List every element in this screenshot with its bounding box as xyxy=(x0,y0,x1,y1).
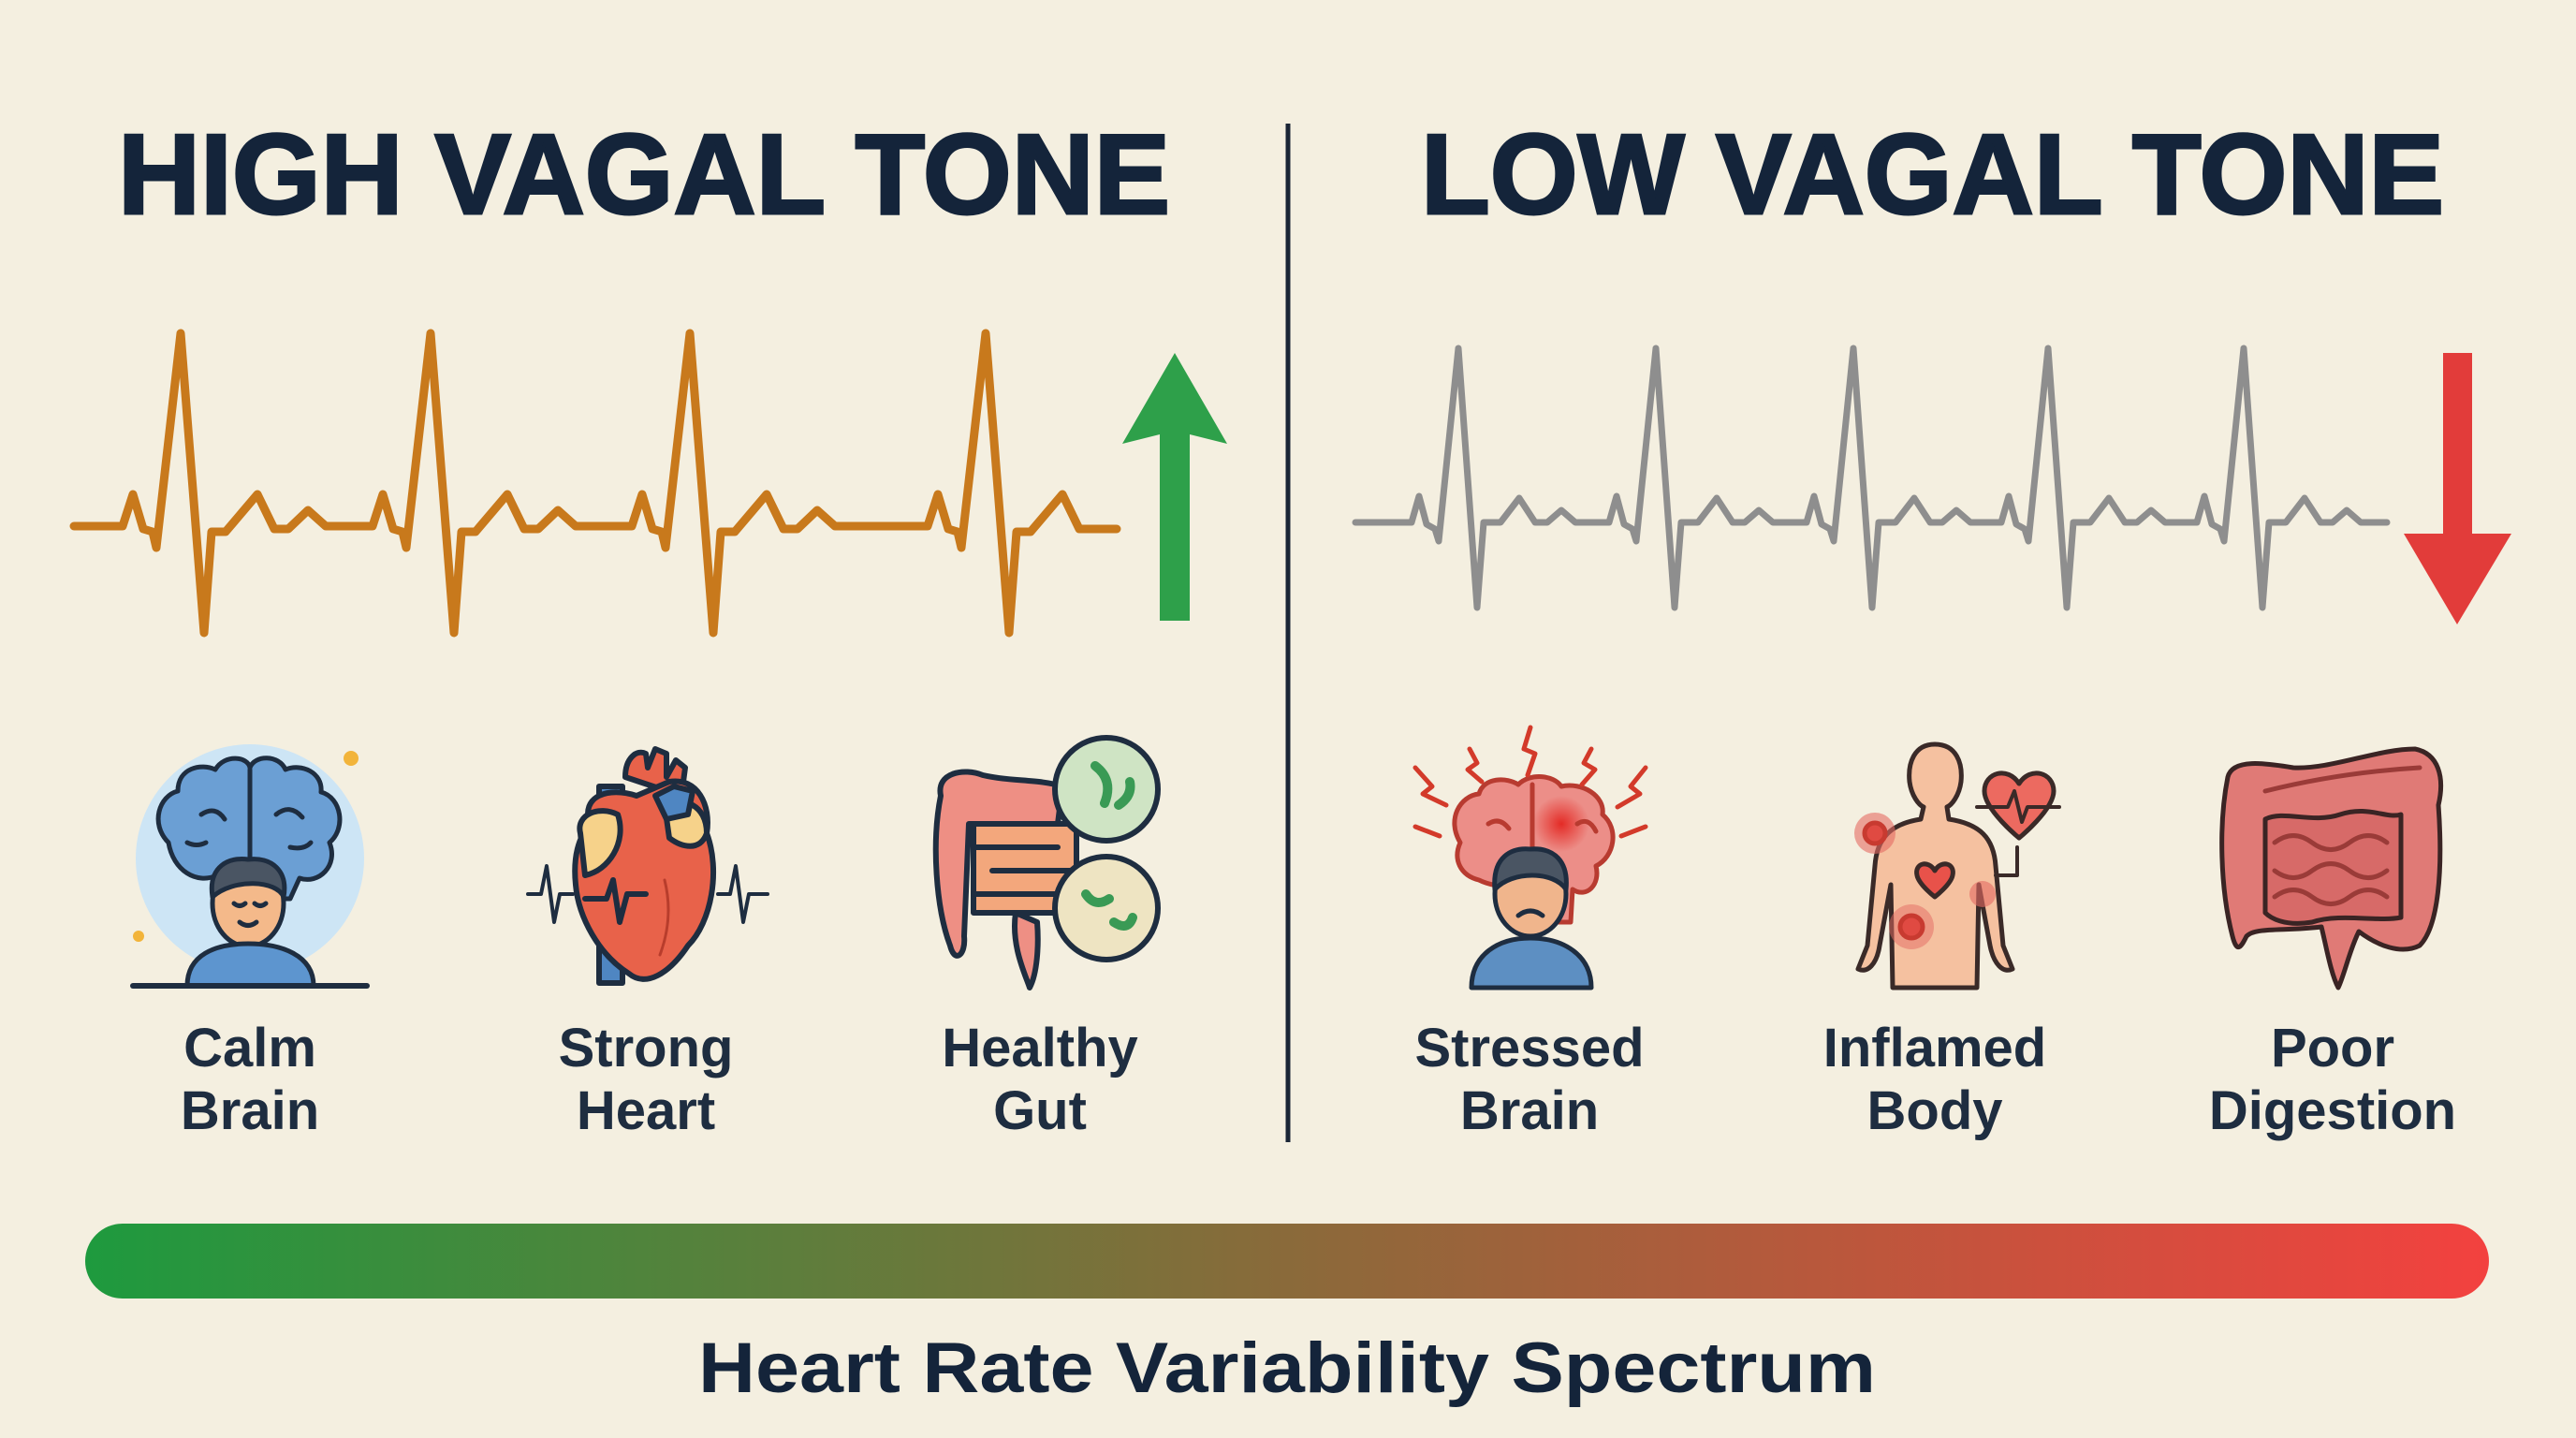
label: calm brain: Calm xyxy=(183,1018,316,1078)
icon: healthy gut xyxy=(936,738,1158,988)
caption: heart rate variability spectrum: Heart Rate Variability Spectrum xyxy=(698,1328,1876,1408)
label: stressed brain: Brain xyxy=(1460,1080,1599,1141)
label: inflamed body: Body xyxy=(1866,1080,2003,1141)
label: healthy gut: Gut xyxy=(993,1080,1087,1141)
label: stressed brain: Stressed xyxy=(1414,1018,1645,1078)
label: healthy gut: Healthy xyxy=(942,1018,1138,1078)
label: poor digestion: Digestion xyxy=(2209,1080,2456,1141)
chart: low HRV ECG waveform xyxy=(1355,348,2387,608)
icon: calm brain xyxy=(133,744,367,986)
label: strong heart: Strong xyxy=(559,1018,733,1078)
icon: inflamed body xyxy=(1854,744,2059,988)
spectrum bar xyxy=(85,1224,2489,1299)
chart: high HRV ECG waveform xyxy=(74,333,1117,633)
label: calm brain: Brain xyxy=(181,1080,319,1141)
icon: stressed brain xyxy=(1415,727,1646,988)
icon: poor digestion xyxy=(2222,749,2441,988)
label: inflamed body: Inflamed xyxy=(1823,1018,2046,1078)
title: high vagal tone: HIGH VAGAL TONE xyxy=(118,110,1170,238)
title: low vagal tone: LOW VAGAL TONE xyxy=(1421,110,2444,238)
icon: strong heart xyxy=(528,749,768,983)
arrow: red down xyxy=(2404,353,2511,624)
arrow: green up xyxy=(1122,353,1227,621)
divider line xyxy=(1286,124,1290,1142)
label: strong heart: Heart xyxy=(577,1080,715,1141)
label: poor digestion: Poor xyxy=(2271,1018,2394,1078)
